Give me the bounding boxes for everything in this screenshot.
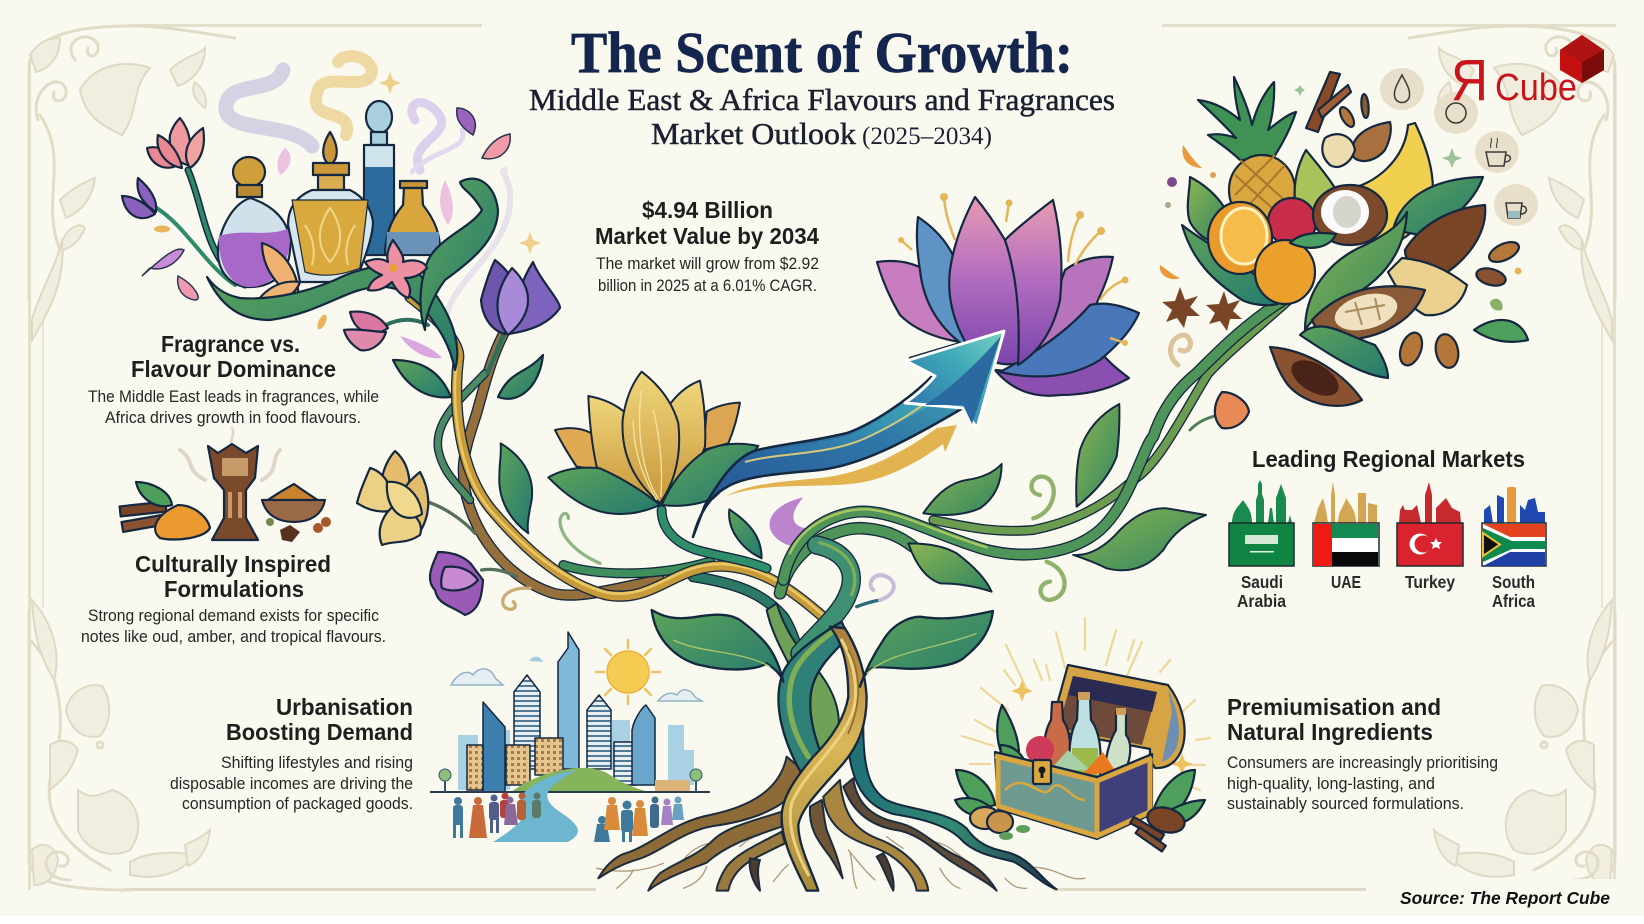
lotus stamens — [901, 197, 1125, 343]
left vines and golden lotus — [410, 297, 827, 647]
market labels: Saudi — [1241, 572, 1283, 592]
arrow body — [693, 330, 1004, 537]
dark cacao pod — [1270, 347, 1362, 406]
purple small stem — [155, 207, 235, 285]
burner — [208, 444, 258, 540]
sparkles — [154, 72, 541, 331]
hill — [511, 768, 650, 792]
culturally inspired text: Culturally Inspired — [135, 551, 331, 577]
spice bowl — [264, 484, 322, 503]
urbanisation text: Urbanisation — [276, 694, 413, 720]
left gold flower — [357, 451, 428, 545]
premiumisation text: Premiumisation and — [1227, 694, 1441, 720]
big cocoa — [1405, 205, 1485, 277]
market value stat — [595, 197, 819, 295]
subtitle years: (2025–2034) — [862, 123, 992, 150]
tree roots and trunk — [597, 543, 1085, 891]
gold swoosh — [725, 425, 957, 497]
urbanisation text: consumption of packaged goods. — [182, 794, 413, 813]
growth arrow — [693, 330, 1004, 537]
pineapple crown — [1198, 77, 1296, 160]
market labels: UAE — [1331, 572, 1361, 592]
pink tulip — [147, 118, 204, 168]
light rays — [962, 618, 1210, 790]
purple bud flower — [430, 552, 483, 615]
small leaf on fruit — [1290, 233, 1336, 248]
pink blossom — [365, 240, 427, 298]
leaf right of trunk — [860, 611, 993, 687]
market labels: South — [1492, 572, 1535, 592]
tall blue bottle — [364, 101, 394, 255]
upper loop strand — [800, 545, 851, 653]
peach leaf flower — [258, 243, 300, 301]
pink small tulip — [344, 312, 388, 350]
market value stat: Market Value by 2034 — [595, 223, 819, 249]
sun — [596, 640, 660, 704]
curl green — [560, 514, 600, 563]
market value stat: The market will grow from $2.92 — [596, 254, 819, 273]
culturally inspired text — [81, 551, 386, 646]
market labels: Arabia — [1237, 591, 1286, 611]
report cube logo — [1451, 35, 1604, 113]
golden lotus — [548, 372, 758, 514]
floating petals — [142, 108, 510, 358]
south africa skyline and flag — [1482, 487, 1546, 566]
premiumisation text: high-quality, long-lasting, and — [1227, 774, 1435, 793]
leaf below stem — [729, 509, 762, 558]
perfume bottle cluster — [122, 56, 560, 399]
fragrance vs flavour text: Flavour Dominance — [131, 356, 336, 382]
leaf on left branch — [499, 443, 532, 533]
purple crescent — [770, 497, 808, 546]
right branch vines — [780, 290, 1300, 607]
almond and garlic — [1322, 122, 1391, 167]
chest body front — [995, 752, 1097, 839]
arrow head over lotus — [905, 331, 1004, 428]
saudi arabia skyline and flag — [1229, 480, 1294, 566]
swirl and dots — [1160, 85, 1522, 365]
river — [493, 770, 578, 842]
leaf swoosh — [207, 266, 457, 370]
purple lotus — [877, 193, 1139, 396]
lock — [1033, 760, 1051, 784]
culturally inspired text: Strong regional demand exists for specific — [88, 606, 379, 625]
culturally inspired text: notes like oud, amber, and tropical flavours. — [81, 627, 386, 646]
round purple bottle — [218, 157, 290, 287]
pear — [1295, 150, 1342, 229]
thin roots — [597, 835, 1085, 888]
cinnamon sticks — [120, 502, 169, 532]
urbanisation text: disposable incomes are driving the — [170, 774, 413, 793]
urbanisation text: Boosting Demand — [226, 719, 413, 745]
tan cake — [1388, 258, 1467, 315]
stem leaves — [393, 355, 543, 399]
side leaves — [955, 770, 1205, 824]
urbanisation text — [170, 694, 413, 813]
trees — [439, 769, 702, 792]
market labels: Africa — [1492, 591, 1535, 611]
spice icon badges — [1380, 68, 1538, 226]
central gold bottle — [288, 132, 373, 282]
bottom leaf — [1300, 326, 1388, 378]
chest contents — [1026, 736, 1116, 775]
fragrance vs flavour text: Fragrance vs. — [161, 331, 300, 357]
chest body side — [1097, 754, 1152, 839]
cinnamon — [1306, 72, 1370, 132]
right branch leaves — [908, 404, 1206, 592]
left leaves — [1188, 177, 1231, 241]
pineapple — [1229, 155, 1295, 225]
purple tulip — [481, 260, 560, 372]
trunk back strand — [767, 603, 839, 757]
small spices — [266, 517, 331, 542]
chest trim — [995, 755, 1152, 836]
source note: Source: The Report Cube — [1400, 888, 1610, 908]
chest herbs — [997, 705, 1019, 780]
premiumisation text: Natural Ingredients — [1227, 719, 1433, 745]
open lid — [1050, 665, 1185, 768]
nuts beside chest — [970, 803, 1187, 851]
center green leaf — [1305, 212, 1407, 330]
logo text R: Я — [1451, 48, 1488, 113]
leading regional markets panel — [1229, 446, 1546, 611]
banana — [1345, 123, 1433, 251]
premiumisation text: sustainably sourced formulations. — [1227, 794, 1464, 813]
fragrance vs flavour text: Africa drives growth in food flavours. — [105, 408, 361, 427]
market value stat: $4.94 Billion — [642, 197, 773, 223]
amber — [155, 505, 210, 540]
uae skyline and flag — [1313, 482, 1379, 566]
back buildings — [458, 720, 694, 790]
fruit and spice cluster — [1160, 68, 1538, 430]
market value stat: billion in 2025 at a 6.01% CAGR. — [598, 276, 817, 295]
towers — [467, 632, 690, 792]
clouds — [451, 669, 503, 685]
open cacao — [1312, 286, 1425, 340]
apple — [1268, 198, 1316, 246]
swoosh upper leaf — [420, 179, 498, 330]
nuts — [1396, 238, 1528, 370]
fragrance vs flavour text — [88, 331, 379, 427]
left branch vines — [410, 297, 827, 647]
logo cube — [1560, 35, 1604, 83]
scent smoke — [226, 56, 510, 320]
curl gold — [503, 588, 530, 609]
teal root — [848, 727, 1057, 889]
trunk gold strand — [782, 627, 867, 891]
small purple flower — [122, 178, 156, 218]
leaf left of trunk — [652, 610, 783, 682]
brown roots — [598, 757, 997, 891]
crowd — [453, 792, 684, 842]
turkey skyline and flag — [1397, 482, 1463, 566]
city illustration — [430, 632, 710, 842]
bottles — [1044, 692, 1130, 780]
title: The Scent of Growth: — [571, 20, 1073, 85]
pink small tulip stem — [386, 320, 428, 325]
culturally inspired text: Formulations — [164, 576, 304, 602]
treasure chest illustration — [955, 618, 1210, 851]
ground line — [430, 791, 710, 793]
subtitle line two: Market Outlook — [651, 116, 857, 151]
small gold bottle — [385, 181, 440, 255]
green leaf — [136, 482, 172, 506]
star anise — [1162, 287, 1242, 331]
premiumisation text: Consumers are increasingly prioritising — [1227, 753, 1498, 772]
panel heading: Leading Regional Markets — [1252, 446, 1525, 472]
incense burner illustration — [120, 428, 331, 542]
orange half — [1208, 202, 1272, 274]
source strip backing — [1366, 879, 1644, 916]
orange whole — [1255, 240, 1315, 304]
market labels: Turkey — [1405, 572, 1455, 592]
trunk teal strand — [778, 622, 848, 777]
small orange flower — [1190, 392, 1249, 430]
curls — [1031, 477, 1054, 518]
top leaf — [1393, 177, 1483, 235]
premiumisation text — [1227, 694, 1498, 813]
market labels — [1237, 572, 1535, 611]
logo text Cube: Cube — [1495, 67, 1577, 109]
subtitle line one: Middle East & Africa Flavours and Fragrances — [529, 82, 1115, 117]
urbanisation text: Shifting lifestyles and rising — [221, 753, 413, 772]
smoke wisps — [180, 428, 280, 480]
fragrance vs flavour text: The Middle East leads in fragrances, while — [88, 387, 379, 406]
coconut — [1313, 185, 1387, 245]
title block — [529, 20, 1115, 151]
pink tulip stem — [188, 170, 245, 285]
